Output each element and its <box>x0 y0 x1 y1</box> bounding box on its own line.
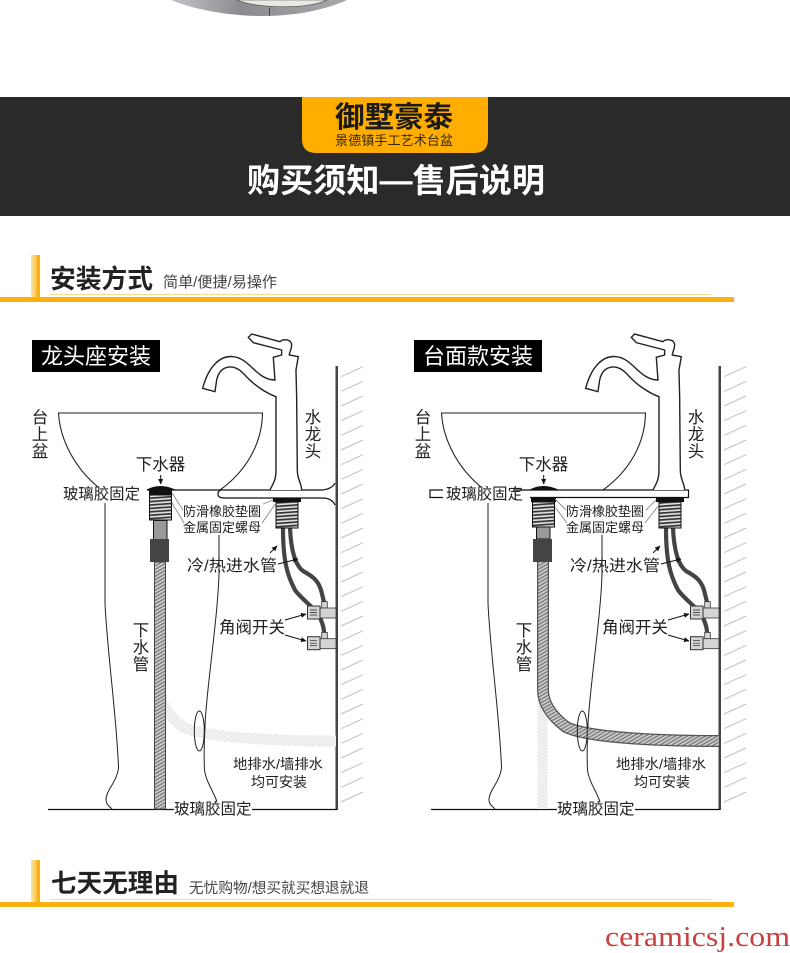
text labels: 角阀开关 <box>602 618 668 637</box>
angle valve upper <box>308 602 336 619</box>
text labels: 玻璃胶固定 <box>63 485 140 503</box>
faucet <box>586 334 685 490</box>
arrows <box>544 475 689 641</box>
text labels: 管 <box>516 655 532 674</box>
brand badge: 御墅豪泰 <box>335 101 453 134</box>
section heading: seven-day returns <box>0 860 734 907</box>
angle valve lower <box>308 632 336 650</box>
wall-drain ellipse <box>577 711 587 751</box>
drain fitting <box>530 486 558 562</box>
brand badge <box>302 97 488 153</box>
text labels: 角阀开关 <box>219 618 285 637</box>
text labels: 下水器 <box>136 455 186 474</box>
text labels: 管 <box>133 655 149 674</box>
label: faucet seat: 龙头座安装 <box>41 344 151 369</box>
text labels: 均可安装 <box>251 774 307 790</box>
brand badge: 景德镇手工艺术台盆 <box>335 133 453 148</box>
text labels: 头 <box>305 442 321 461</box>
leader lines <box>555 499 659 523</box>
wall <box>718 366 746 810</box>
text labels: 金属固定螺母 <box>183 520 261 535</box>
text labels: 冷/热进水管 <box>187 557 277 575</box>
header band <box>0 97 790 216</box>
counter shelf <box>147 483 335 505</box>
water hoses <box>283 528 324 634</box>
text labels: 水 <box>305 408 322 427</box>
text labels <box>415 408 706 818</box>
text labels: 金属固定螺母 <box>566 520 644 535</box>
label: countertop: 台面款安装 <box>423 344 533 369</box>
section heading: installation: 安装方式 <box>50 264 153 294</box>
section heading: seven-day returns: 无忧购物/想买就买想退就退 <box>189 880 369 897</box>
text labels: 下水器 <box>519 455 569 474</box>
faucet <box>203 334 302 490</box>
wall-drain ellipse <box>194 711 204 751</box>
wall <box>336 366 363 810</box>
section heading: seven-day returns: 七天无理由 <box>51 869 179 898</box>
text labels: 玻璃胶固定 <box>557 800 635 818</box>
basin <box>58 413 262 490</box>
text labels: 防滑橡胶垫圈 <box>183 504 261 519</box>
text labels: 玻璃胶固定 <box>446 485 523 503</box>
pedestal <box>488 503 602 809</box>
ghost vertical pipe <box>538 692 548 809</box>
water hoses <box>666 528 707 634</box>
panel: countertop installation <box>415 334 746 818</box>
text labels: 下 <box>516 622 532 640</box>
panel: faucet-seat installation <box>32 334 363 818</box>
text labels: 均可安装 <box>634 774 690 790</box>
section heading: installation: 简单/便捷/易操作 <box>163 274 277 291</box>
text labels: 台 <box>415 408 431 427</box>
text labels: 地排水/墙排水 <box>233 756 323 772</box>
text labels: 盆 <box>32 442 48 461</box>
text labels: 盆 <box>415 442 431 461</box>
arrows <box>161 475 306 641</box>
floor line <box>48 808 337 810</box>
floor line <box>431 808 720 810</box>
drain fitting <box>147 486 175 809</box>
text labels: 下 <box>133 622 149 640</box>
text labels: 上 <box>415 425 431 444</box>
text labels <box>32 408 323 818</box>
text labels: 防滑橡胶垫圈 <box>566 504 644 519</box>
text labels: 玻璃胶固定 <box>174 800 252 818</box>
text labels: 水 <box>688 408 705 427</box>
leader lines <box>172 493 276 523</box>
ghost drain pipe <box>160 690 336 741</box>
text labels: 上 <box>32 425 48 444</box>
product photo remnant <box>171 0 347 16</box>
angle valve upper <box>690 602 719 619</box>
text labels: 头 <box>688 442 704 461</box>
main heading: 购买须知—售后说明 <box>247 162 545 199</box>
angle valve lower <box>690 632 719 650</box>
faucet nut <box>656 498 684 528</box>
faucet nut <box>273 498 301 528</box>
bent drain pipe <box>543 562 719 741</box>
text labels: 台 <box>32 408 48 427</box>
basin <box>442 413 646 490</box>
text labels: 地排水/墙排水 <box>616 756 706 772</box>
pedestal <box>105 503 219 809</box>
text labels: 水 <box>516 638 533 657</box>
text labels: 龙 <box>688 425 704 444</box>
text labels: 水 <box>133 638 150 657</box>
label: countertop <box>414 340 542 372</box>
label: faucet seat <box>32 340 160 372</box>
counter slab <box>430 490 688 498</box>
watermark: ceramicsj.com <box>605 921 790 953</box>
text labels: 冷/热进水管 <box>570 557 660 575</box>
text labels: 龙 <box>305 425 321 444</box>
section heading: installation <box>0 255 734 302</box>
